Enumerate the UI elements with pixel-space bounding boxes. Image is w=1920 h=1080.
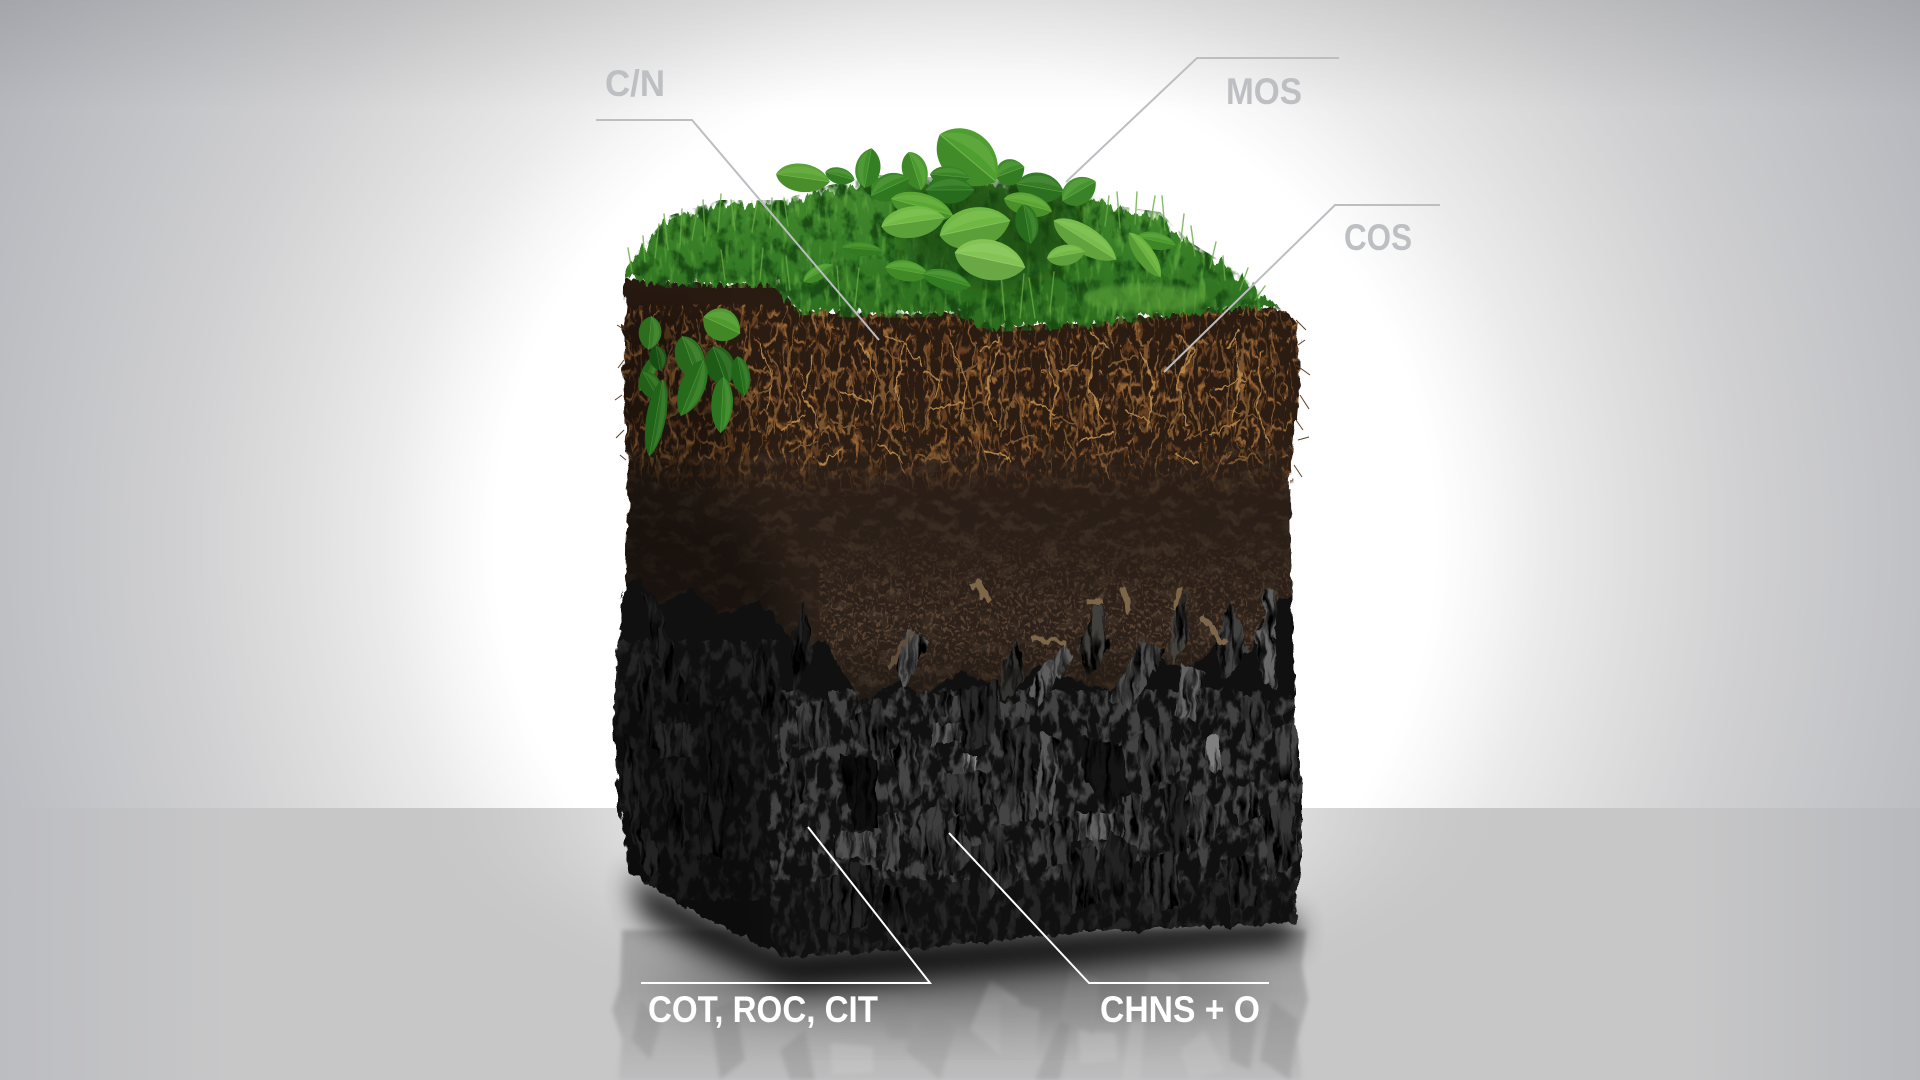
charcoal grain left: [610, 640, 780, 900]
fine grain in the mid soil: [818, 537, 1294, 689]
callout: COS: [1164, 205, 1440, 372]
callout: COT, ROC, CIT: COT, ROC, CIT: [648, 989, 878, 1030]
callout: C/N: C/N: [605, 63, 665, 104]
root mat: [621, 303, 1302, 492]
shaded left face of root layer: [621, 304, 759, 506]
shaded left face of charcoal: [612, 712, 734, 902]
charcoal shards: [620, 590, 1298, 940]
callout: MOS: MOS: [1226, 71, 1302, 112]
contact shadow under the block: [630, 872, 1296, 990]
reflective floor: [0, 808, 1920, 1080]
callout: COS: COS: [1344, 217, 1412, 258]
leafy plants on top: [774, 115, 1177, 296]
callout: MOS: [1066, 58, 1339, 182]
soil block: [590, 270, 1320, 970]
individual dark roots: [650, 320, 1276, 478]
callout: CHNS + O: [949, 833, 1269, 1030]
grass blades: [628, 192, 1265, 320]
wood chips in the soil transition: [886, 580, 1228, 670]
charcoal layer base: [600, 578, 1320, 970]
dark earth mottling: [600, 450, 1320, 690]
charcoal grain bottom: [770, 880, 1310, 960]
callout: COT, ROC, CIT: [641, 827, 930, 1030]
charcoal grain front: [770, 690, 1310, 880]
background wall with white glow: [0, 0, 1920, 808]
left side plant: [633, 302, 754, 458]
grass texture and shading: [628, 175, 1282, 332]
floor reflection of the block: [612, 930, 1308, 1080]
soil base layers: [600, 270, 1320, 970]
grass mound: [624, 180, 1278, 328]
callout: CHNS + O: CHNS + O: [1100, 989, 1260, 1030]
shaded left face of mid soil: [600, 500, 790, 700]
stray hair roots around the block edges: [615, 320, 1310, 477]
bright moss patch: [1083, 284, 1207, 312]
callout: C/N: [596, 63, 879, 340]
individual bright roots: [760, 330, 1268, 465]
